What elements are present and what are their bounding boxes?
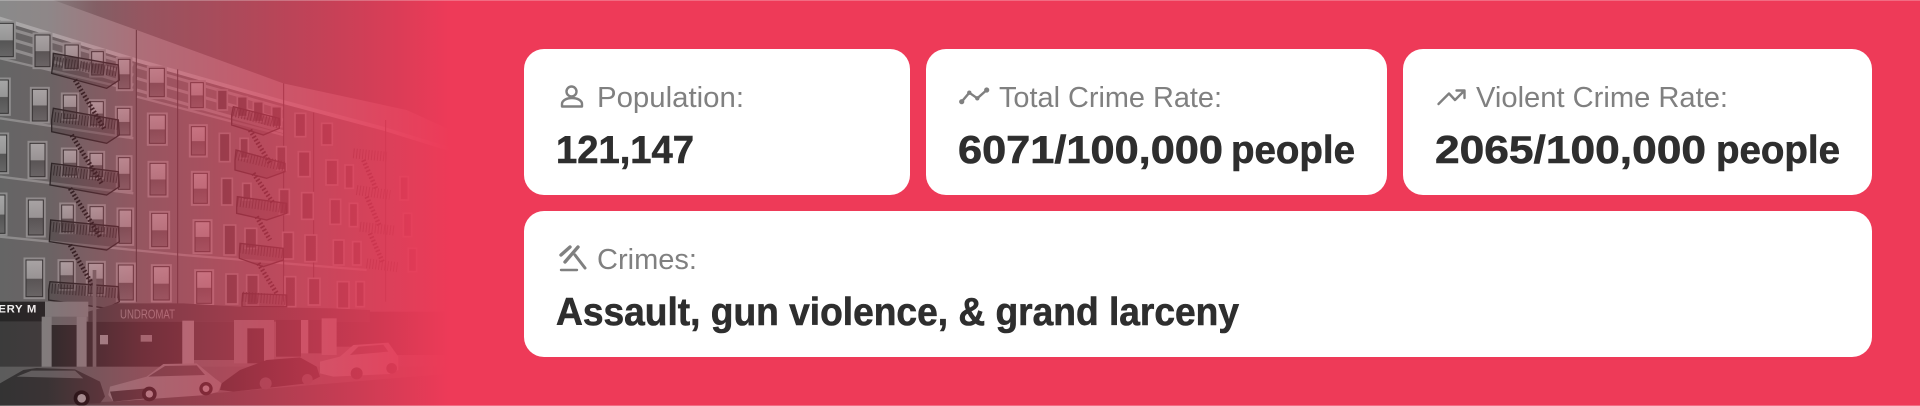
- label: total crime rate: Total Crime Rate:: [999, 82, 1222, 114]
- value: total crime rate: 6071/100,000: [958, 129, 1223, 172]
- value: violent crime rate: 2065/100,000: [1435, 129, 1706, 172]
- label: population: Population:: [597, 82, 744, 114]
- value: violent crime rate: people: [1716, 129, 1840, 172]
- bottom edge line: [0, 405, 1920, 406]
- label: crimes: Crimes:: [597, 244, 697, 276]
- value: total crime rate: people: [1231, 129, 1355, 172]
- panel: violent crime rate: [1403, 49, 1872, 195]
- icon: person: [562, 86, 582, 106]
- panel: population: [524, 49, 910, 195]
- photo: apartment building with fire escapes: [0, 0, 480, 406]
- panel: total crime rate: [926, 49, 1387, 195]
- icon: trending up arrow: [1438, 90, 1464, 104]
- icon: gavel: [561, 247, 585, 270]
- panel: crimes: [524, 211, 1872, 357]
- icon: line chart: [959, 87, 989, 104]
- photo: apartment building with fire escapes: UNDROMAT: [120, 308, 175, 322]
- top edge line: [0, 0, 1920, 1]
- label: violent crime rate: Violent Crime Rate:: [1476, 82, 1728, 114]
- value: crimes: Assault, gun violence, & grand larceny: [556, 291, 1239, 334]
- value: population: 121,147: [556, 129, 694, 172]
